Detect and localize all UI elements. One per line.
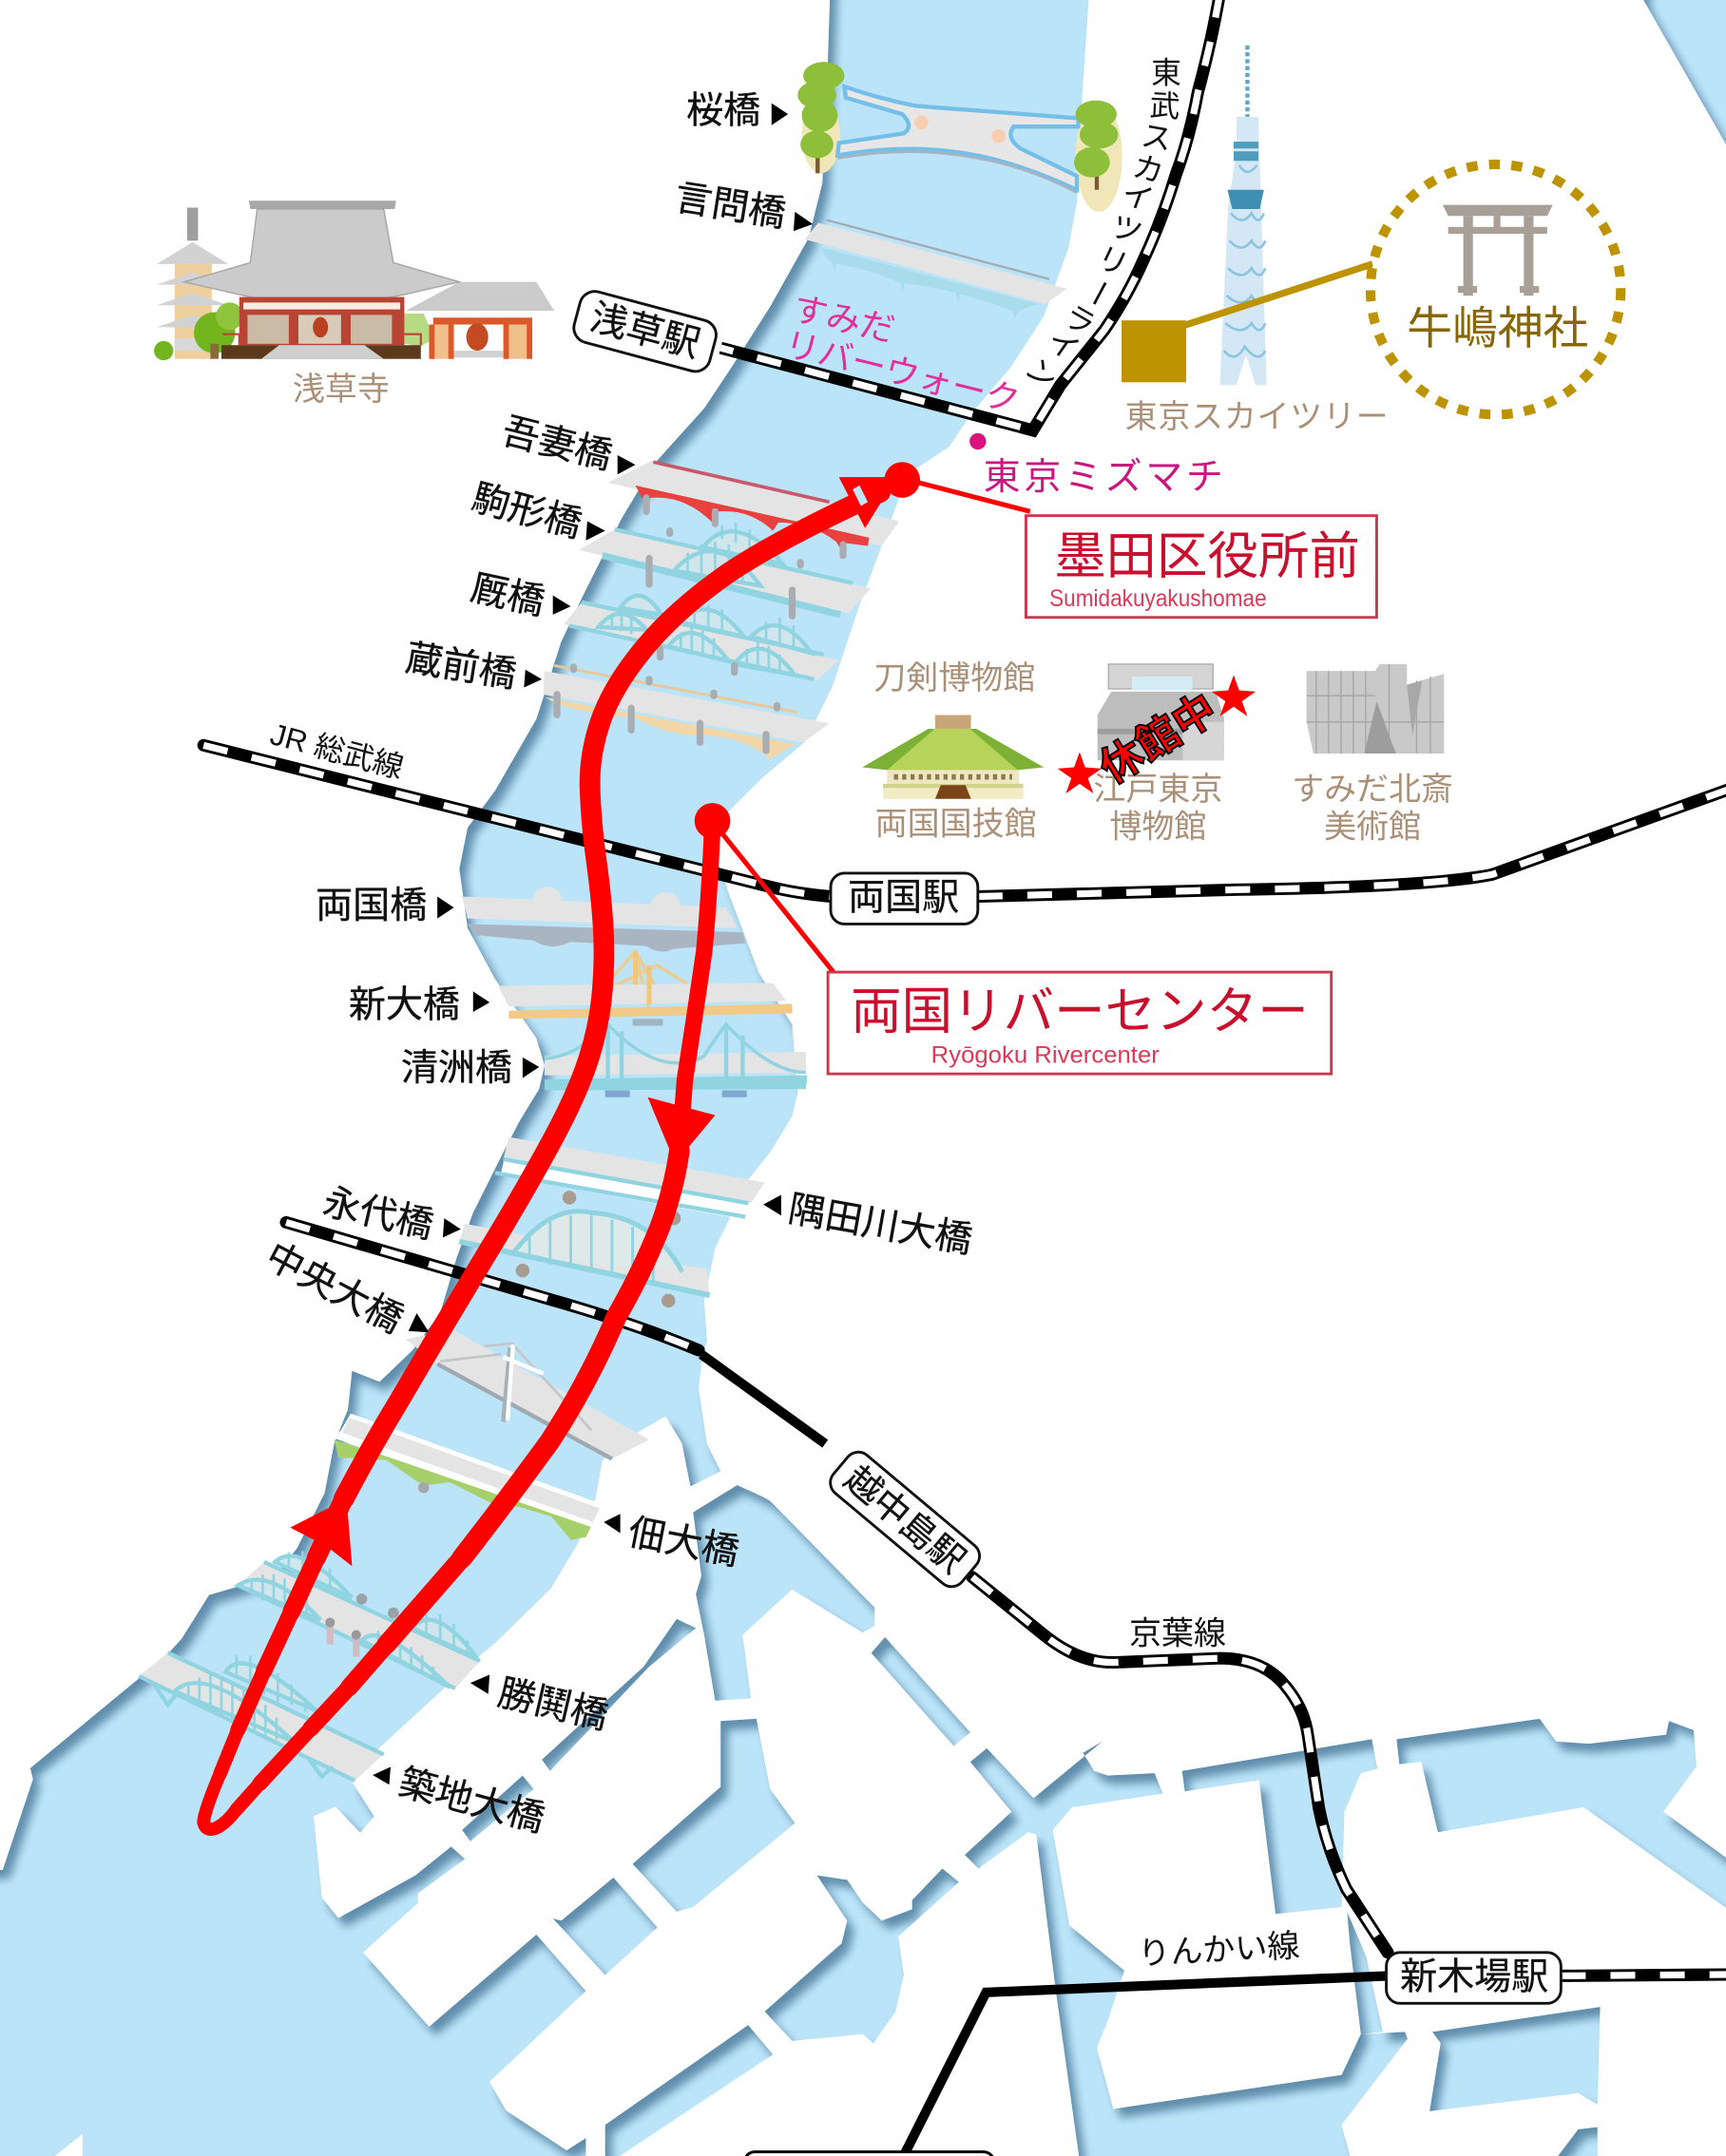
bridge: Kototoi	[805, 220, 1067, 319]
label: Tobu Skytree Line: 東	[1151, 56, 1181, 90]
label: Tobu Skytree Line: ツ	[1106, 208, 1147, 251]
bridge: Kuramae	[544, 665, 830, 759]
label: Tobu Skytree Line: ー	[1077, 272, 1122, 315]
callout: Ushijima shrine	[1371, 164, 1621, 414]
label: Sumida River Walk: すみだ	[789, 289, 898, 350]
bridge labels	[259, 91, 975, 1841]
label: Ushijima shrine: 牛嶋神社	[1407, 304, 1588, 354]
bridge labels: 勝鬨橋	[494, 1672, 612, 1737]
land sliver bottom left	[55, 2134, 83, 2156]
bridge labels: 佃大橋	[625, 1512, 742, 1574]
label: Tobu Skytree Line: リ	[1092, 239, 1134, 283]
label: Rinkai Line: りんかい線	[1138, 1928, 1300, 1973]
label: Sumida Hokusai Museum: すみだ北斎	[1292, 772, 1453, 808]
bridge: Komagata	[579, 523, 871, 616]
bridge labels: 築地大橋	[394, 1763, 548, 1841]
bridge: Sumidagawa-Ohashi	[495, 1137, 765, 1225]
label: Tobu Skytree Line: ス	[1139, 118, 1175, 157]
bridge: Eitai	[459, 1212, 710, 1307]
label: Keiyo Line: 京葉線	[1129, 1616, 1226, 1652]
bridge labels: 隅田川大橋	[785, 1189, 975, 1261]
label: Edo-Tokyo Museum: 江戸東京	[1093, 772, 1222, 808]
icon: torii gate	[1443, 205, 1553, 296]
icon: Ryogoku Kokugikan	[862, 715, 1044, 799]
marker: Ushijima shrine square and leader	[1122, 264, 1372, 382]
bridge: Chuo-Ohashi	[406, 1329, 649, 1459]
bridge labels: 中央大橋	[259, 1235, 410, 1342]
bridge labels: 言問橋	[672, 178, 789, 235]
label: Ryogoku Kokugikan: 両国国技館	[875, 806, 1037, 842]
label: Tobu Skytree Line: ラ	[1058, 298, 1102, 343]
bridge: Ryogoku	[462, 887, 745, 951]
rail line: Keiyo Line	[286, 1222, 1726, 1975]
stop: Sumida Ward Office: Sumidakuyakushomae	[1049, 586, 1267, 612]
bottom station box stub	[744, 2152, 994, 2156]
bridge pointer triangles	[373, 104, 813, 1784]
label: Tobu Skytree Line: 武	[1149, 88, 1180, 124]
bridge: Shin-Ohashi	[498, 951, 792, 1026]
bridge: Kachidoki	[238, 1551, 480, 1689]
bridge: Kiyosu	[545, 1024, 807, 1097]
bridge: Tsukuda-Ohashi	[335, 1414, 603, 1540]
bridge labels: 両国橋	[316, 886, 427, 926]
bridge labels: 桜橋	[686, 91, 760, 132]
label: Sensoji: 浅草寺	[293, 372, 390, 408]
station: Etchujima: 越中島駅	[837, 1459, 972, 1580]
stop: Ryogoku River Center	[695, 803, 1332, 1074]
bridge labels: 厩橋	[467, 567, 548, 623]
route: red cruise path	[203, 492, 880, 1829]
icon: Sensoji temple	[154, 200, 554, 360]
bridge: Azuma	[608, 461, 899, 556]
Tokyo Mizumachi marker and label: 東京ミズマチ	[984, 457, 1227, 498]
stop: Sumida Ward Office: 墨田区役所前	[1055, 528, 1360, 584]
station: Shin-Kiba	[1387, 1953, 1561, 2003]
label: Tobu Skytree Line: イ	[1041, 322, 1085, 368]
stop: Ryogoku River Center: Ryōgoku Rivercenter	[931, 1043, 1160, 1069]
rail line: Tobu Skytree Line	[720, 0, 1219, 430]
station: Asakusa	[570, 288, 719, 374]
label: JR Sobu Line: JR 総武線	[267, 716, 408, 785]
label: Sumida Hokusai Museum: 美術館	[1324, 809, 1421, 845]
station: Ryogoku	[831, 873, 978, 924]
bridge labels: 清洲橋	[401, 1048, 512, 1089]
icon: Tokyo Skytree	[1219, 46, 1267, 385]
closed notice: 休館中	[1091, 684, 1225, 792]
bridge labels: 永代橋	[319, 1182, 437, 1247]
label: Token museum: 刀剣博物館	[873, 660, 1035, 696]
rail line: Rinkai Line	[901, 1975, 1389, 2156]
label: Edo-Tokyo Museum: 博物館	[1109, 809, 1206, 845]
station: Ryogoku: 両国駅	[848, 877, 959, 918]
station: Shin-Kiba: 新木場駅	[1400, 1956, 1548, 1997]
closed notice	[1058, 676, 1256, 793]
stop: Sumida Ward Office	[884, 462, 1376, 618]
label: Sumida River Walk: リバーウォーク	[780, 324, 1024, 420]
bridge labels: 駒形橋	[468, 477, 585, 545]
label: Tobu Skytree Line: イ	[1118, 176, 1158, 218]
route direction arrows	[290, 477, 896, 1566]
bridge: Sakurabashi with trees	[797, 62, 1122, 212]
label: Tobu Skytree Line	[1018, 56, 1181, 397]
bridge: Umaya	[564, 596, 839, 680]
bridge: Tsukiji-Ohashi	[139, 1652, 384, 1781]
icon: Sumida Hokusai Museum	[1307, 664, 1444, 754]
bridge labels: 新大橋	[349, 984, 460, 1025]
label: Tokyo Skytree: 東京スカイツリー	[1125, 399, 1389, 435]
label: Tobu Skytree Line: ン	[1018, 352, 1064, 397]
icon: Edo-Tokyo Museum	[1098, 664, 1224, 760]
bridge labels: 吾妻橋	[498, 410, 616, 477]
Tokyo Mizumachi marker and label	[969, 433, 1227, 498]
station: Asakusa: 浅草駅	[586, 297, 704, 366]
rail line: JR Sobu Line	[203, 745, 1726, 896]
bridge labels: 蔵前橋	[403, 638, 519, 696]
label: Tobu Skytree Line: カ	[1129, 149, 1167, 190]
stop: Ryogoku River Center: 両国リバーセンター	[851, 983, 1309, 1040]
